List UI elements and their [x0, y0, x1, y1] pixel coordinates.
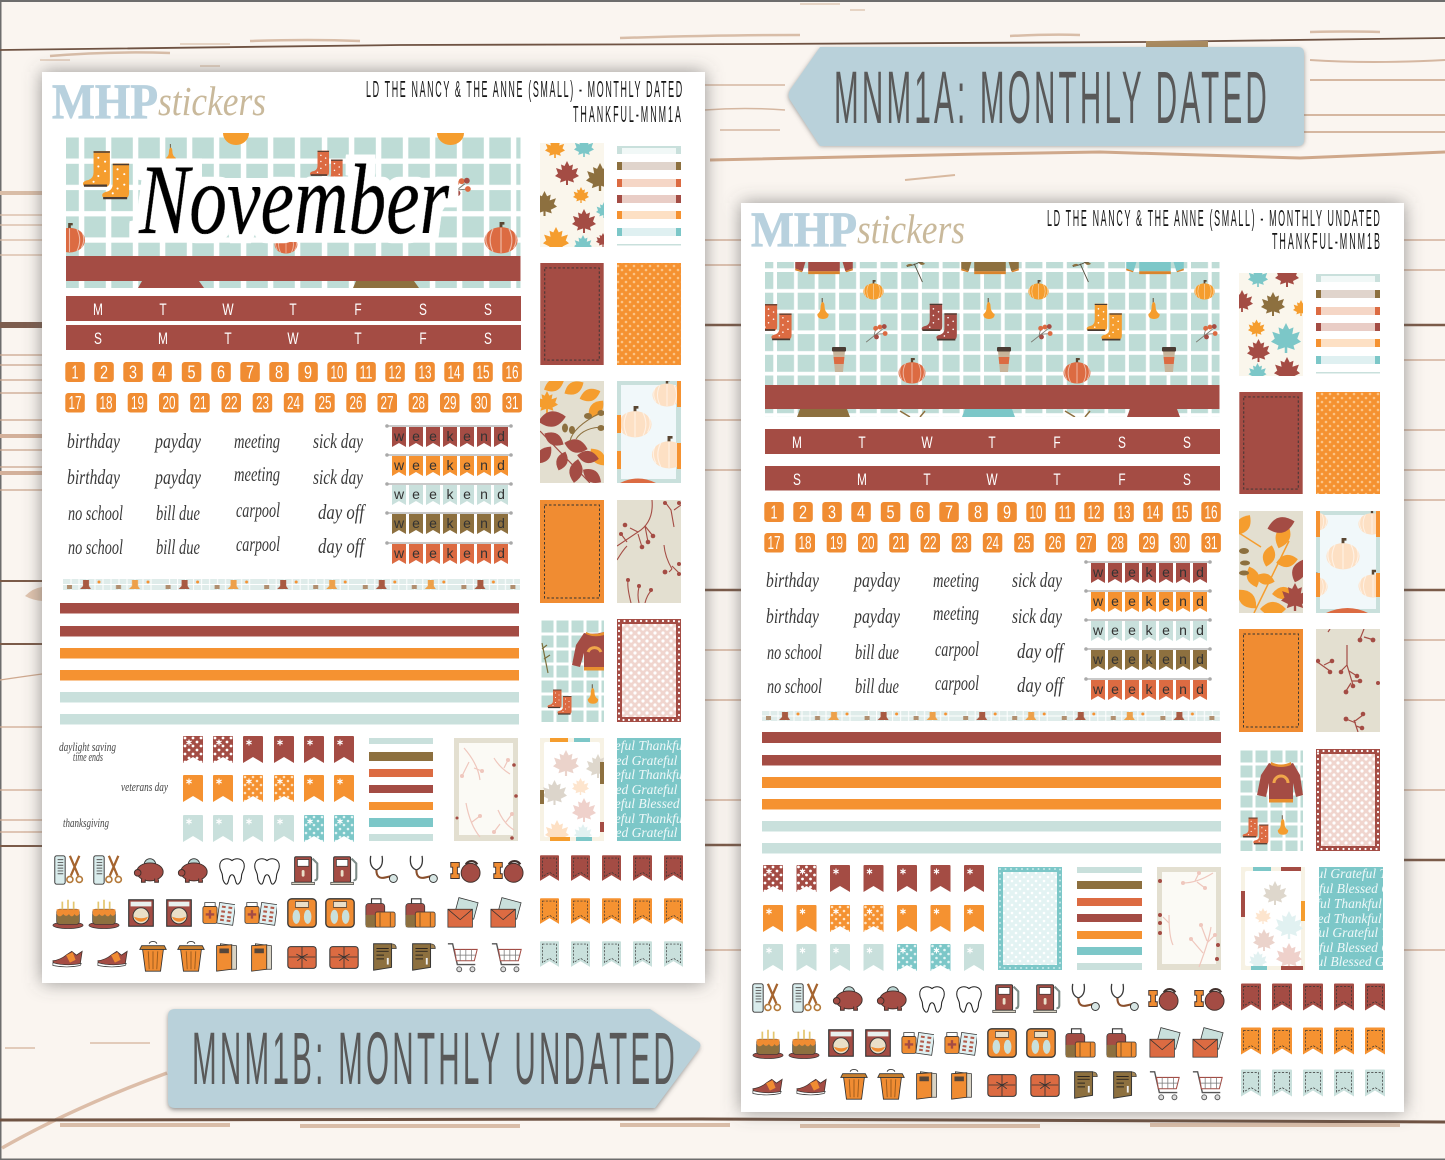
- weekend banners: weekend: [1092, 622, 1204, 638]
- panel: thankful blessed grateful tile: tful Grateful Thankful: [1309, 866, 1428, 881]
- month title: November: [138, 144, 450, 255]
- date number stickers: 3: [129, 362, 137, 382]
- panel: red dashed box: [1239, 392, 1303, 494]
- icon: trash bin: [140, 941, 204, 971]
- date number stickers: 15: [1176, 502, 1188, 522]
- date number stickers: 23: [256, 393, 269, 413]
- icon: receipt: [374, 944, 435, 970]
- icon: washing machine: [129, 900, 191, 926]
- date number stickers: [764, 502, 1221, 553]
- panel: thankful blessed grateful tile: teful Thankful Blessed: [611, 767, 731, 782]
- date number stickers: 15: [476, 362, 490, 382]
- panel: orange dashed box: [540, 500, 604, 603]
- date number stickers: 18: [798, 533, 812, 553]
- icon: weights: [1149, 989, 1224, 1010]
- flag stickers: [183, 736, 354, 842]
- date number stickers: 28: [1111, 533, 1124, 553]
- panel: checklist bars tile: [1316, 274, 1380, 374]
- icon: parcel: [988, 1075, 1059, 1096]
- event script words: bill due: [156, 535, 200, 559]
- event script words: bill due: [855, 674, 899, 698]
- panel: grid sweater tile: [1240, 750, 1303, 851]
- icon: tooth: [220, 859, 279, 884]
- flag stickers: stitched column block: [540, 855, 683, 967]
- date number stickers: 4: [857, 502, 865, 522]
- event script words: payday: [153, 465, 202, 489]
- event script words: birthday: [766, 604, 819, 628]
- icon: stethoscope: [370, 856, 437, 882]
- event script words: carpool: [935, 637, 979, 661]
- date number stickers: 8: [974, 502, 982, 522]
- long colour stripes: [60, 603, 519, 724]
- icon: pills: [902, 1032, 978, 1055]
- sheet title text: LD THE NANCY & THE ANNE (SMALL) - MONTHLY UNDATED: [1047, 205, 1380, 231]
- panel: berry twig tile: [617, 500, 681, 603]
- icon: receipt: [1075, 1072, 1136, 1098]
- icon: tooth: [920, 987, 981, 1012]
- date number stickers: 30: [474, 393, 488, 413]
- panel: thankful blessed grateful tile: tful Grateful Thankful: [1311, 925, 1430, 940]
- event script words: no school: [767, 674, 822, 698]
- event script words: meeting: [933, 601, 979, 625]
- sheet: MNM1A monthly dated: [42, 72, 731, 983]
- date number stickers: 25: [318, 393, 332, 413]
- event script words: day off: [1017, 673, 1066, 697]
- event script words: birthday: [67, 465, 120, 489]
- icon: shopping cart: [448, 944, 521, 972]
- date number stickers: 10: [1030, 502, 1042, 522]
- date number stickers: 30: [1174, 533, 1186, 553]
- sheet title text: THANKFUL-MNM1A: [573, 101, 681, 127]
- date number stickers: [65, 362, 522, 413]
- panel: thankful blessed grateful tile: teful Thankful Blessed: [611, 811, 731, 826]
- holiday script labels: [59, 740, 168, 830]
- event script words: payday: [852, 568, 901, 592]
- holiday script labels: veterans day: [121, 780, 168, 794]
- panel: pink dots frame: [617, 619, 681, 722]
- date number stickers: 4: [158, 362, 166, 382]
- date number stickers: 16: [506, 362, 518, 382]
- event script words: birthday: [766, 568, 819, 592]
- date number stickers: 3: [828, 502, 836, 522]
- logo: MHP stickers: [52, 73, 266, 129]
- icon: washing machine: [829, 1030, 890, 1056]
- icon row: errands icons: [753, 1028, 1223, 1059]
- panel: thankful blessed grateful tile: ssed Grateful Thankful: [605, 825, 729, 840]
- panel: checklist bars tile: [617, 146, 681, 246]
- date number stickers: 29: [444, 393, 456, 413]
- weekend banners: [1084, 560, 1212, 700]
- event script words: carpool: [236, 532, 280, 556]
- icon: mail: [1150, 1028, 1223, 1057]
- panel: thankful blessed grateful tile: kful Blessed Grateful: [1313, 881, 1427, 896]
- icon: book: [217, 944, 271, 971]
- event script words: bill due: [156, 501, 200, 525]
- date number stickers: 26: [1048, 533, 1062, 553]
- icon: luggage: [366, 899, 435, 927]
- weekend banners: [385, 424, 513, 564]
- date number stickers: 28: [412, 393, 425, 413]
- date number stickers: 21: [194, 393, 206, 413]
- date number stickers: 26: [350, 393, 362, 413]
- event script words: no school: [68, 535, 123, 559]
- weekday strips: SMTWTFS: [94, 330, 492, 349]
- icon row: household icons: [53, 941, 521, 972]
- date number stickers: 23: [955, 533, 968, 553]
- event script words: sick day: [313, 429, 363, 453]
- date number stickers: 11: [360, 362, 372, 382]
- logo: MHP stickers: MHP: [52, 73, 158, 129]
- icon row: daily icons: [55, 856, 523, 885]
- washi strip: [762, 711, 1220, 721]
- icon: stethoscope: [1072, 984, 1138, 1010]
- date number stickers: 25: [1018, 533, 1030, 553]
- date number stickers: 5: [188, 362, 196, 382]
- event script words: payday: [852, 604, 901, 628]
- event script words: payday: [153, 429, 202, 453]
- date number stickers: 1: [770, 502, 778, 522]
- event script words: sick day: [1012, 568, 1062, 592]
- panel: thankful blessed grateful tile: tful Blessed Grateful: [1309, 954, 1421, 969]
- icon: comb and scissors: [753, 984, 820, 1012]
- date number stickers: 16: [1204, 502, 1218, 522]
- date number stickers: 12: [388, 362, 402, 382]
- icon: mail: [448, 898, 521, 927]
- icon: trash bin: [841, 1069, 904, 1099]
- panel: orange dots tile: [617, 263, 681, 365]
- weekend banners: weekend: [393, 486, 505, 502]
- icon: piggy bank: [833, 987, 906, 1010]
- icon: fuel pump: [292, 857, 356, 885]
- date number stickers: 20: [862, 533, 874, 553]
- date number stickers: 31: [506, 393, 518, 413]
- sheet title text: THANKFUL-MNM1B: [1272, 228, 1380, 254]
- icon: bathroom scale: [988, 1029, 1055, 1057]
- panel: thankful blessed grateful tile: ssed Thankful Blessed: [1307, 911, 1426, 926]
- date number stickers: 6: [217, 362, 225, 382]
- date number stickers: 21: [892, 533, 906, 553]
- panel: berry twig tile: [1316, 629, 1380, 732]
- panel: foliage tile: [540, 381, 604, 483]
- date number stickers: 18: [100, 393, 112, 413]
- icon: piggy bank: [134, 859, 207, 882]
- date number stickers: 13: [418, 362, 432, 382]
- date number stickers: 17: [768, 533, 780, 553]
- date number stickers: 20: [162, 393, 176, 413]
- icon: luggage: [1066, 1029, 1136, 1057]
- icon: fuel pump: [993, 985, 1059, 1013]
- date number stickers: 27: [380, 393, 394, 413]
- panel: foliage tile: [1239, 511, 1303, 613]
- weekend banners: weekend: [1092, 564, 1204, 580]
- weekend banners: weekend: [1092, 651, 1204, 667]
- icon: book: [917, 1072, 971, 1099]
- flag stickers: stitched column block: [1241, 984, 1385, 1096]
- weekend banners: weekend: [393, 428, 505, 444]
- logo: MHP stickers: [751, 201, 965, 257]
- panel: thankful blessed grateful tile: ssed Grateful Thankful: [605, 753, 729, 768]
- panel: faded leaves tile: [1241, 867, 1305, 970]
- event script words: meeting: [234, 462, 280, 486]
- panel: maple leaf tile: [540, 143, 604, 247]
- icon: comb and scissors: [55, 856, 121, 884]
- short colour stripes: [1077, 867, 1142, 970]
- panel: twig frame sticker: [454, 738, 518, 841]
- date number stickers: 29: [1142, 533, 1156, 553]
- weekend banners: weekend: [393, 457, 505, 473]
- panel: orange dashed box: [1239, 629, 1303, 732]
- panel: grid sweater tile: [541, 620, 604, 722]
- weekend banners: weekend: [393, 515, 505, 531]
- date number stickers: 2: [100, 362, 108, 382]
- panel: pumpkin tile: [1316, 511, 1380, 613]
- date number stickers: 2: [799, 502, 807, 522]
- date number stickers: 19: [830, 533, 843, 553]
- date number stickers: 10: [330, 362, 344, 382]
- icon row: daily icons: [753, 984, 1224, 1013]
- event script words: day off: [318, 534, 367, 558]
- event script words: day off: [1017, 639, 1066, 663]
- date number stickers: 13: [1118, 502, 1130, 522]
- panel: November header banner: [54, 133, 521, 288]
- date number stickers: 7: [945, 502, 953, 522]
- event script words: carpool: [935, 671, 979, 695]
- date number stickers: 11: [1058, 502, 1072, 522]
- date number stickers: 6: [916, 502, 924, 522]
- icon: cake: [53, 900, 119, 929]
- panel: pumpkin tile: [617, 381, 681, 483]
- long colour stripes: [762, 732, 1221, 854]
- logo: MHP stickers: stickers: [857, 206, 965, 252]
- sheet title text: [366, 76, 682, 127]
- icon row: household icons: [753, 1069, 1222, 1100]
- callout tag: MNM1A monthly dated: MNM1A: MONTHLY DATED: [834, 56, 1267, 139]
- panel: thankful blessed grateful tile: teful Thankful Blessed: [611, 738, 731, 753]
- panel: thankful blessed grateful tile: teful Blessed Grateful: [611, 796, 729, 811]
- event script words: [766, 568, 1066, 698]
- event script words: sick day: [1012, 604, 1062, 628]
- date number stickers: 1: [72, 362, 78, 382]
- event script words: birthday: [67, 429, 120, 453]
- date number stickers: 9: [304, 362, 312, 382]
- panel: thankful blessed grateful tile: [1307, 866, 1430, 970]
- event script words: day off: [318, 500, 367, 524]
- date number stickers: 22: [224, 393, 238, 413]
- weekday strips: MTWTFSS: [93, 301, 492, 320]
- logo: MHP stickers: MHP: [751, 201, 857, 257]
- panel: maple leaf tile: [1239, 273, 1303, 376]
- date number stickers: 24: [986, 533, 999, 553]
- panel: teal dots frame: [998, 867, 1062, 970]
- icon: shopping cart: [1150, 1072, 1222, 1100]
- date number stickers: 24: [287, 393, 300, 413]
- event script words: meeting: [234, 429, 280, 453]
- weekday strips: MTWTFSS: [792, 434, 1191, 453]
- panel: twig frame sticker: [1157, 867, 1221, 970]
- date number stickers: 8: [275, 362, 283, 382]
- flag stickers: [763, 865, 984, 971]
- event script words: sick day: [313, 465, 363, 489]
- weekday strips: [765, 429, 1220, 490]
- panel: pink dots frame: [1316, 749, 1380, 851]
- panel: faded leaves tile: [540, 738, 604, 841]
- date number stickers: 27: [1080, 533, 1092, 553]
- date number stickers: 7: [246, 362, 254, 382]
- icon: parcel: [288, 947, 358, 968]
- holiday script labels: thanksgiving: [63, 816, 109, 830]
- icon row: errands icons: [53, 898, 521, 929]
- date number stickers: 14: [1146, 502, 1160, 522]
- weekday strips: [66, 296, 521, 350]
- icon: pills: [203, 902, 278, 925]
- date number stickers: 31: [1204, 533, 1218, 553]
- date number stickers: 9: [1003, 502, 1011, 522]
- logo: MHP stickers: stickers: [158, 78, 266, 124]
- icon: bathroom scale: [288, 899, 354, 927]
- sheet: MNM1B monthly undated: [741, 201, 1430, 1112]
- short colour stripes: [369, 738, 433, 841]
- weekend banners: weekend: [1092, 681, 1204, 697]
- date number stickers: 17: [68, 393, 82, 413]
- icon: sneaker: [753, 1079, 826, 1095]
- event script words: carpool: [236, 498, 280, 522]
- panel: autumn pattern header banner: [765, 262, 1220, 417]
- panel: thankful blessed grateful tile: [605, 738, 731, 841]
- panel: orange dots tile: [1316, 392, 1380, 494]
- weekend banners: weekend: [393, 545, 505, 561]
- weekend banners: weekend: [1092, 593, 1204, 609]
- date number stickers: 5: [886, 502, 894, 522]
- holiday script labels: time ends: [73, 750, 103, 764]
- event script words: meeting: [933, 568, 979, 592]
- sheet title text: [1047, 205, 1380, 254]
- date number stickers: 22: [924, 533, 936, 553]
- washi strip: [63, 579, 520, 590]
- event script words: no school: [68, 501, 123, 525]
- panel: red dashed box: [540, 263, 604, 365]
- weekday strips: SMTWTFS: [793, 471, 1191, 490]
- panel: thankful blessed grateful tile: kful Blessed Grateful: [1313, 940, 1427, 955]
- panel: thankful blessed grateful tile: ssed Grateful Thankful: [605, 782, 729, 797]
- panel: thankful blessed grateful tile: sful Thankful Blessed: [1311, 896, 1427, 911]
- date number stickers: 14: [448, 362, 460, 382]
- holiday script labels: daylight saving: [59, 740, 116, 754]
- date number stickers: 12: [1088, 502, 1100, 522]
- event script words: [67, 429, 367, 559]
- icon: cake: [753, 1030, 819, 1059]
- event script words: no school: [767, 640, 822, 664]
- date number stickers: 19: [131, 393, 144, 413]
- icon: sneaker: [53, 951, 127, 967]
- icon: weights: [451, 861, 523, 882]
- sheet title text: LD THE NANCY & THE ANNE (SMALL) - MONTHLY DATED: [366, 76, 682, 102]
- event script words: bill due: [855, 640, 899, 664]
- callout tag: MNM1B monthly undated: MNM1B: MONTHLY UNDATED: [192, 1017, 675, 1100]
